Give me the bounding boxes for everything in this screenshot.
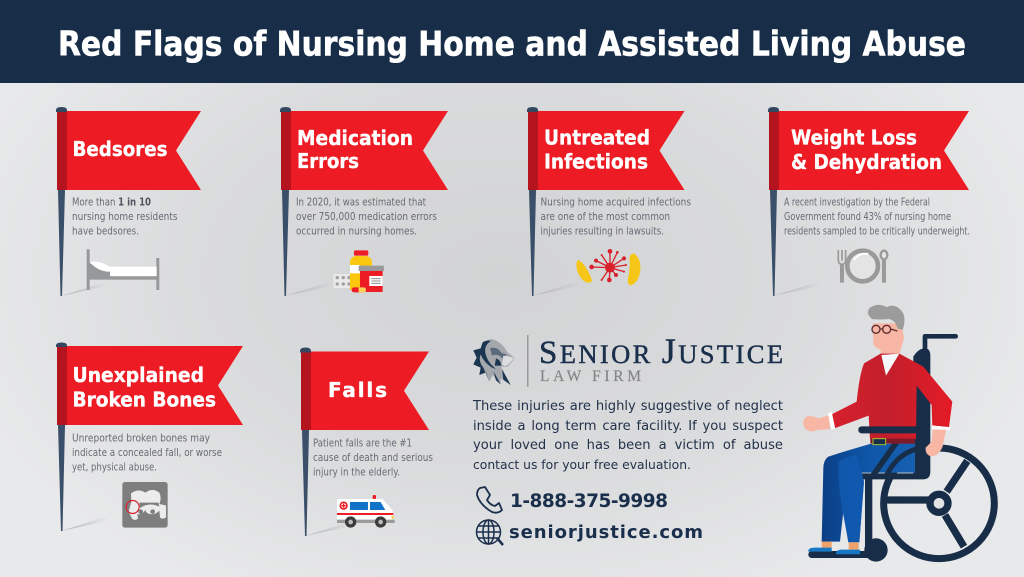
- icon: ambulance: [337, 495, 395, 528]
- panel: bedsores: [56, 107, 201, 296]
- icon: plate and cutlery: [838, 250, 887, 283]
- illustration: man in wheelchair: [803, 305, 994, 562]
- wordmark: SENIOR JUSTICE: [539, 331, 783, 371]
- flag: untreated infections: Untreated: [544, 126, 650, 150]
- text: weight loss: A recent investigation by the Federal: [784, 196, 930, 208]
- flag: broken bones: [56, 342, 243, 531]
- text: falls line 3: injury in the elderly.: [313, 466, 400, 478]
- icon: globe: [476, 520, 503, 545]
- flag: untreated infections: Infections: [544, 150, 648, 174]
- text block: call to action: inside a long term care facility. If you suspect: [473, 419, 783, 434]
- trousers: [822, 443, 915, 542]
- text: bedsores: More than 1 in 10: [72, 196, 151, 208]
- flag: bedsores: Bedsores: [72, 137, 168, 161]
- text block: call to action: These injuries are highly suggestive of neglect: [473, 399, 783, 414]
- text: broken bones line 3: yet, physical abuse.: [72, 462, 157, 474]
- panel: unexplained broken bones: [56, 342, 243, 531]
- flag: falls: Falls: [328, 378, 387, 402]
- icon: medicine: [333, 250, 384, 292]
- panel: untreated infections: [527, 107, 691, 296]
- hair: [868, 305, 905, 330]
- text block: call to action: [472, 399, 783, 472]
- wheel: [884, 448, 994, 559]
- flag: broken bones: Unexplained: [72, 363, 204, 387]
- logo: Senior Justice Law Firm: [473, 331, 783, 387]
- glasses: [872, 325, 897, 333]
- text: bedsores line 2: nursing home residents: [72, 211, 178, 223]
- armrest: [858, 426, 919, 433]
- icon: broken pelvis: [122, 482, 168, 528]
- icon: bed: [87, 249, 159, 290]
- text: falls: Patient falls are the #1: [313, 438, 412, 450]
- right hand: [926, 430, 946, 456]
- text: broken bones: Unreported broken bones may: [72, 432, 210, 444]
- flag: falls: [300, 348, 429, 536]
- icon: germs: [576, 249, 640, 285]
- text: untreated infections line 3: injuries resulting in lawsuits.: [540, 226, 664, 238]
- tagline: LAW FIRM: [540, 368, 641, 385]
- cuffs: [828, 412, 951, 430]
- text: broken bones line 2: indicate a concealed fall, or worse: [72, 447, 222, 459]
- contact details: [476, 487, 703, 545]
- website: seniorjustice.com: [509, 522, 703, 543]
- flag: medication errors: [280, 107, 448, 296]
- divider: [527, 335, 528, 387]
- flag: untreated infections: [527, 107, 684, 296]
- chair frame: [808, 336, 956, 562]
- flag: medication errors: Errors: [297, 149, 359, 173]
- flag: weight loss: [768, 107, 969, 296]
- feet: [808, 542, 860, 554]
- left hand: [803, 416, 830, 431]
- header banner: [0, 0, 1024, 83]
- phone number: 1-888-375-9998: [510, 491, 668, 512]
- belt and buckle: [870, 439, 915, 445]
- text: bedsores line 3: have bedsores.: [72, 226, 139, 238]
- chair strut over trousers: [873, 435, 902, 475]
- flag: weight loss: & Dehydration: [791, 150, 942, 174]
- text: untreated infections line 2: are one of the most common: [540, 211, 670, 223]
- text: medication errors: In 2020, it was estimated that: [296, 196, 426, 208]
- sweater: [832, 354, 952, 439]
- panel: falls: [300, 348, 433, 536]
- text block: call to action: your loved one has been a victim of abuse: [473, 438, 783, 453]
- text: weight loss line 2: Government found 43% of nursing home: [784, 211, 951, 223]
- text: untreated infections: Nursing home acquired infections: [540, 196, 691, 208]
- text: falls line 2: cause of death and serious: [313, 452, 433, 464]
- icon: lion head: [473, 339, 515, 385]
- text block: call to action: contact us for your free evaluation.: [473, 458, 691, 472]
- flag: medication errors: Medication: [297, 126, 413, 150]
- panel: medication errors: [280, 107, 448, 296]
- panel: weight loss and dehydration: [768, 107, 970, 296]
- flag: weight loss: Weight Loss: [791, 126, 917, 150]
- flag: broken bones: Broken Bones: [72, 388, 216, 412]
- icon: phone: [477, 487, 502, 513]
- shirt collar: [881, 354, 899, 376]
- text: weight loss line 3: residents sampled to be critically underweight.: [784, 226, 970, 238]
- flag: bedsores: [56, 107, 201, 296]
- text: medication errors line 3: occurred in nursing homes.: [296, 226, 417, 238]
- neck and head: [873, 323, 904, 362]
- text: medication errors line 2: over 750,000 medication errors: [296, 211, 437, 223]
